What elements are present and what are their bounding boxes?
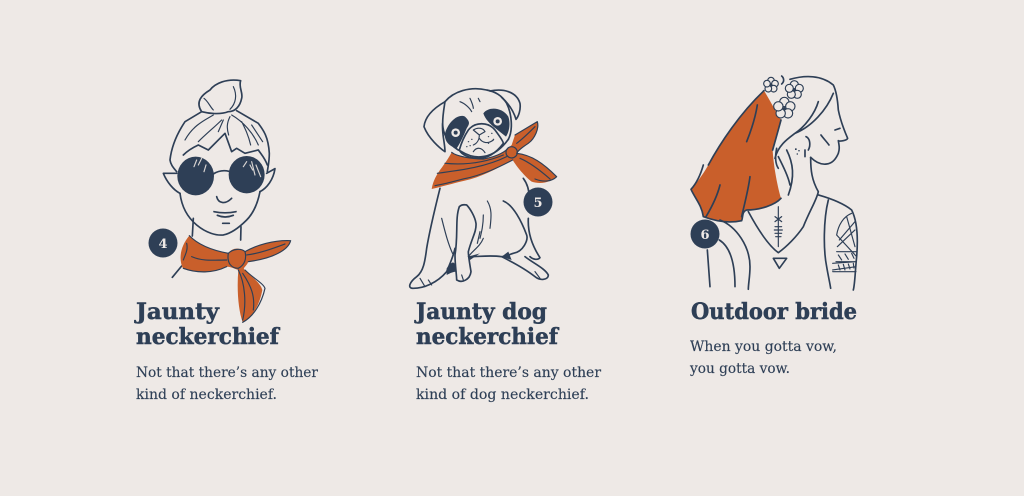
head and hair bbox=[775, 77, 848, 164]
body text bbox=[416, 365, 602, 403]
heading: Jaunty dog neckerchief bbox=[414, 299, 559, 350]
heading: Jaunty dog neckerchief: neckerchief bbox=[416, 324, 559, 350]
heading: Jaunty neckerchief: neckerchief bbox=[136, 324, 281, 350]
veil bbox=[691, 91, 781, 222]
badge 6: 6 bbox=[700, 228, 710, 243]
heading: Outdoor bride: Outdoor bride bbox=[691, 299, 857, 325]
neckerchief bbox=[181, 236, 291, 322]
badge 6 bbox=[690, 220, 720, 248]
panel: jaunty neckerchief bbox=[134, 80, 319, 403]
body text: you gotta vow. bbox=[689, 361, 790, 377]
illustration: pug with neckerchief bbox=[410, 89, 557, 288]
body text bbox=[136, 365, 319, 403]
panel: jaunty dog neckerchief bbox=[410, 89, 602, 403]
badge 4: 4 bbox=[158, 237, 168, 252]
arm tattoo bbox=[833, 213, 857, 272]
illustration: bride in profile with veil bbox=[691, 76, 857, 290]
heading: Jaunty neckerchief bbox=[134, 299, 281, 350]
body text: kind of neckerchief. bbox=[136, 387, 277, 403]
panel: outdoor bride bbox=[689, 76, 857, 377]
body text: Not that there’s any other bbox=[136, 365, 319, 381]
heading: Jaunty dog neckerchief: Jaunty dog bbox=[414, 299, 547, 325]
neckerchief bbox=[432, 122, 557, 189]
body text: When you gotta vow, bbox=[690, 339, 837, 355]
badge 5: 5 bbox=[533, 196, 543, 211]
badge 4 bbox=[148, 228, 178, 258]
pug head bbox=[424, 89, 520, 158]
body text: Not that there’s any other bbox=[416, 365, 602, 381]
illustration: woman in sunglasses with neckerchief bbox=[163, 80, 291, 322]
body text: kind of dog neckerchief. bbox=[416, 387, 589, 403]
flowers bbox=[764, 76, 803, 118]
body text bbox=[689, 339, 837, 377]
badge 5 bbox=[524, 188, 552, 216]
heading: Jaunty neckerchief: Jaunty bbox=[134, 299, 220, 325]
